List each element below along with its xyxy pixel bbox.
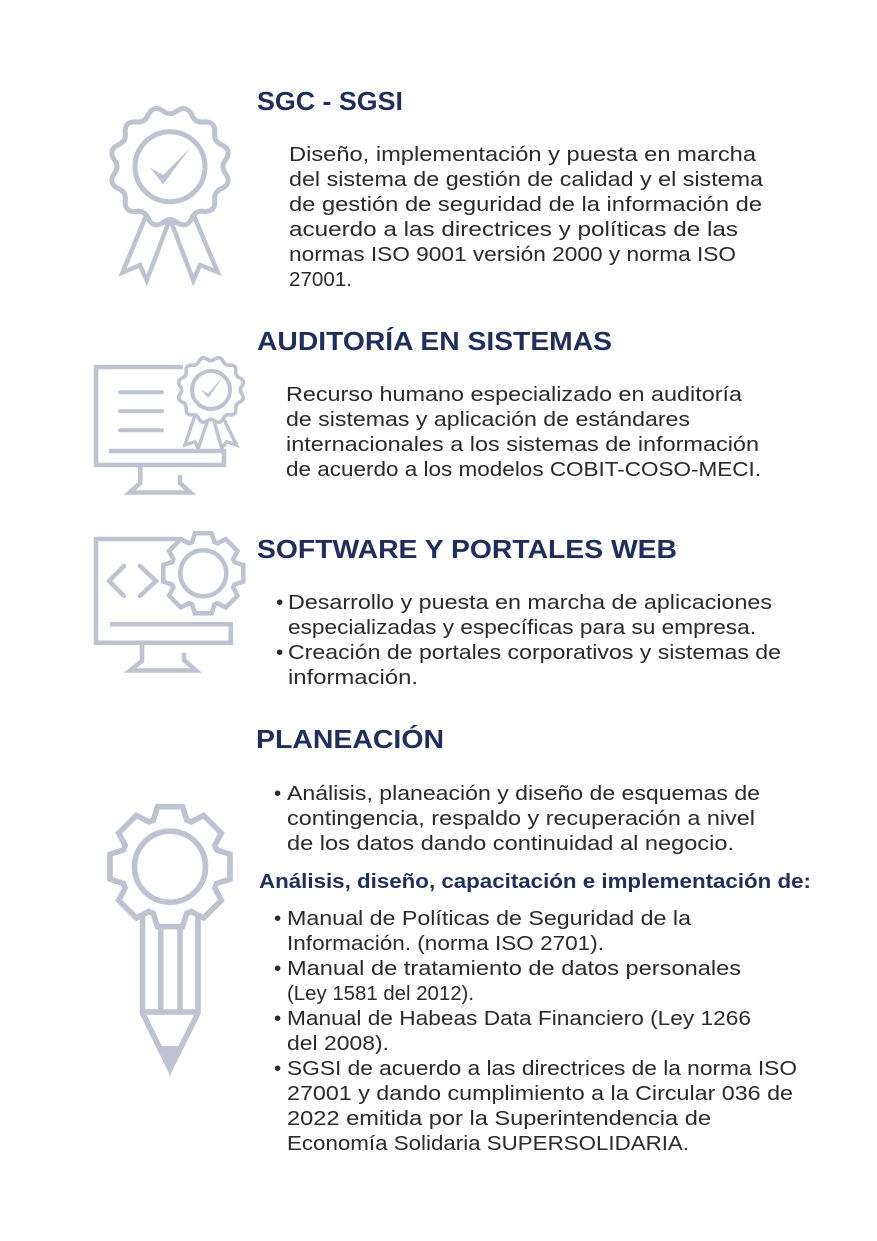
bullet: planeación intro: de los datos dando continuidad al negocio. bbox=[287, 832, 734, 855]
icon: monitor with code and gear bbox=[96, 533, 243, 670]
bullet list: software: Creación de portales corporativos y sistemas de bbox=[288, 641, 781, 664]
text block: SGC description: acuerdo a las directrices y políticas de las bbox=[289, 218, 738, 241]
bullet list: software bbox=[276, 591, 781, 689]
text block: SGC description: del sistema de gestión de calidad y el sistema bbox=[289, 168, 764, 191]
bullet list: manuals and SGSI: Manual de Habeas Data Financiero (Ley 1266 bbox=[287, 1007, 751, 1030]
heading: PLANEACIÓN: PLANEACIÓN bbox=[256, 724, 444, 754]
icon: pencil with gear bbox=[110, 807, 230, 1077]
icon: monitor with certificate rosette bbox=[96, 358, 243, 492]
text block: auditoría description: Recurso humano especializado en auditoría bbox=[286, 383, 743, 406]
text block: SGC description: de gestión de seguridad de la información de bbox=[289, 193, 762, 216]
bullet list: software: Desarrollo y puesta en marcha de aplicaciones bbox=[288, 591, 772, 614]
bullet list: manuals and SGSI bbox=[274, 907, 797, 1155]
bullet list: manuals and SGSI: Manual de Políticas de Seguridad de la bbox=[287, 907, 692, 930]
text block: auditoría description: de sistemas y aplicación de estándares bbox=[286, 408, 690, 431]
bullet: planeación intro: • bbox=[274, 782, 281, 805]
bullet: planeación intro bbox=[274, 782, 760, 855]
bullet list: manuals and SGSI: • bbox=[274, 1057, 281, 1080]
bullet list: manuals and SGSI: Manual de tratamiento de datos personales bbox=[287, 957, 741, 980]
bullet list: manuals and SGSI: 2022 emitida por la Superintendencia de bbox=[287, 1107, 711, 1130]
text block: auditoría description bbox=[286, 383, 761, 481]
bullet list: manuals and SGSI: • bbox=[274, 957, 281, 980]
text block: SGC description: 27001. bbox=[289, 268, 352, 291]
heading: AUDITORÍA EN SISTEMAS: AUDITORÍA EN SISTEMAS bbox=[257, 327, 612, 356]
bullet list: manuals and SGSI: SGSI de acuerdo a las directrices de la norma ISO bbox=[287, 1057, 797, 1080]
heading: SGC - SGSI: SGC - SGSI bbox=[257, 88, 403, 116]
bullet list: software: • bbox=[276, 591, 283, 614]
bullet: planeación intro: contingencia, respaldo y recuperación a nivel bbox=[287, 807, 755, 830]
text block: auditoría description: de acuerdo a los modelos COBIT-COSO-MECI. bbox=[286, 458, 761, 481]
bullet list: manuals and SGSI: del 2008). bbox=[287, 1032, 389, 1055]
icon: award rosette with checkmark bbox=[112, 109, 228, 280]
text block: auditoría description: internacionales a los sistemas de información bbox=[286, 433, 759, 456]
bullet list: manuals and SGSI: Economía Solidaria SUPERSOLIDARIA. bbox=[287, 1132, 689, 1155]
bullet list: software: especializadas y específicas para su empresa. bbox=[288, 616, 756, 639]
bullet list: manuals and SGSI: (Ley 1581 del 2012). bbox=[287, 982, 474, 1005]
heading: SOFTWARE Y PORTALES WEB: SOFTWARE Y PORTALES WEB bbox=[257, 536, 677, 564]
subheading: análisis, diseño, capacitación: Análisis, diseño, capacitación e implementación de: bbox=[259, 871, 811, 893]
bullet list: software: información. bbox=[288, 666, 418, 689]
text block: SGC description: normas ISO 9001 versión 2000 y norma ISO bbox=[289, 243, 736, 266]
bullet list: software: • bbox=[276, 641, 283, 664]
text block: SGC description bbox=[289, 143, 764, 291]
bullet list: manuals and SGSI: • bbox=[274, 1007, 281, 1030]
bullet list: manuals and SGSI: • bbox=[274, 907, 281, 930]
bullet list: manuals and SGSI: 27001 y dando cumplimiento a la Circular 036 de bbox=[287, 1082, 793, 1105]
bullet: planeación intro: Análisis, planeación y diseño de esquemas de bbox=[287, 782, 760, 805]
text block: SGC description: Diseño, implementación y puesta en marcha bbox=[289, 143, 757, 166]
bullet list: manuals and SGSI: Información. (norma ISO 2701). bbox=[287, 932, 604, 955]
